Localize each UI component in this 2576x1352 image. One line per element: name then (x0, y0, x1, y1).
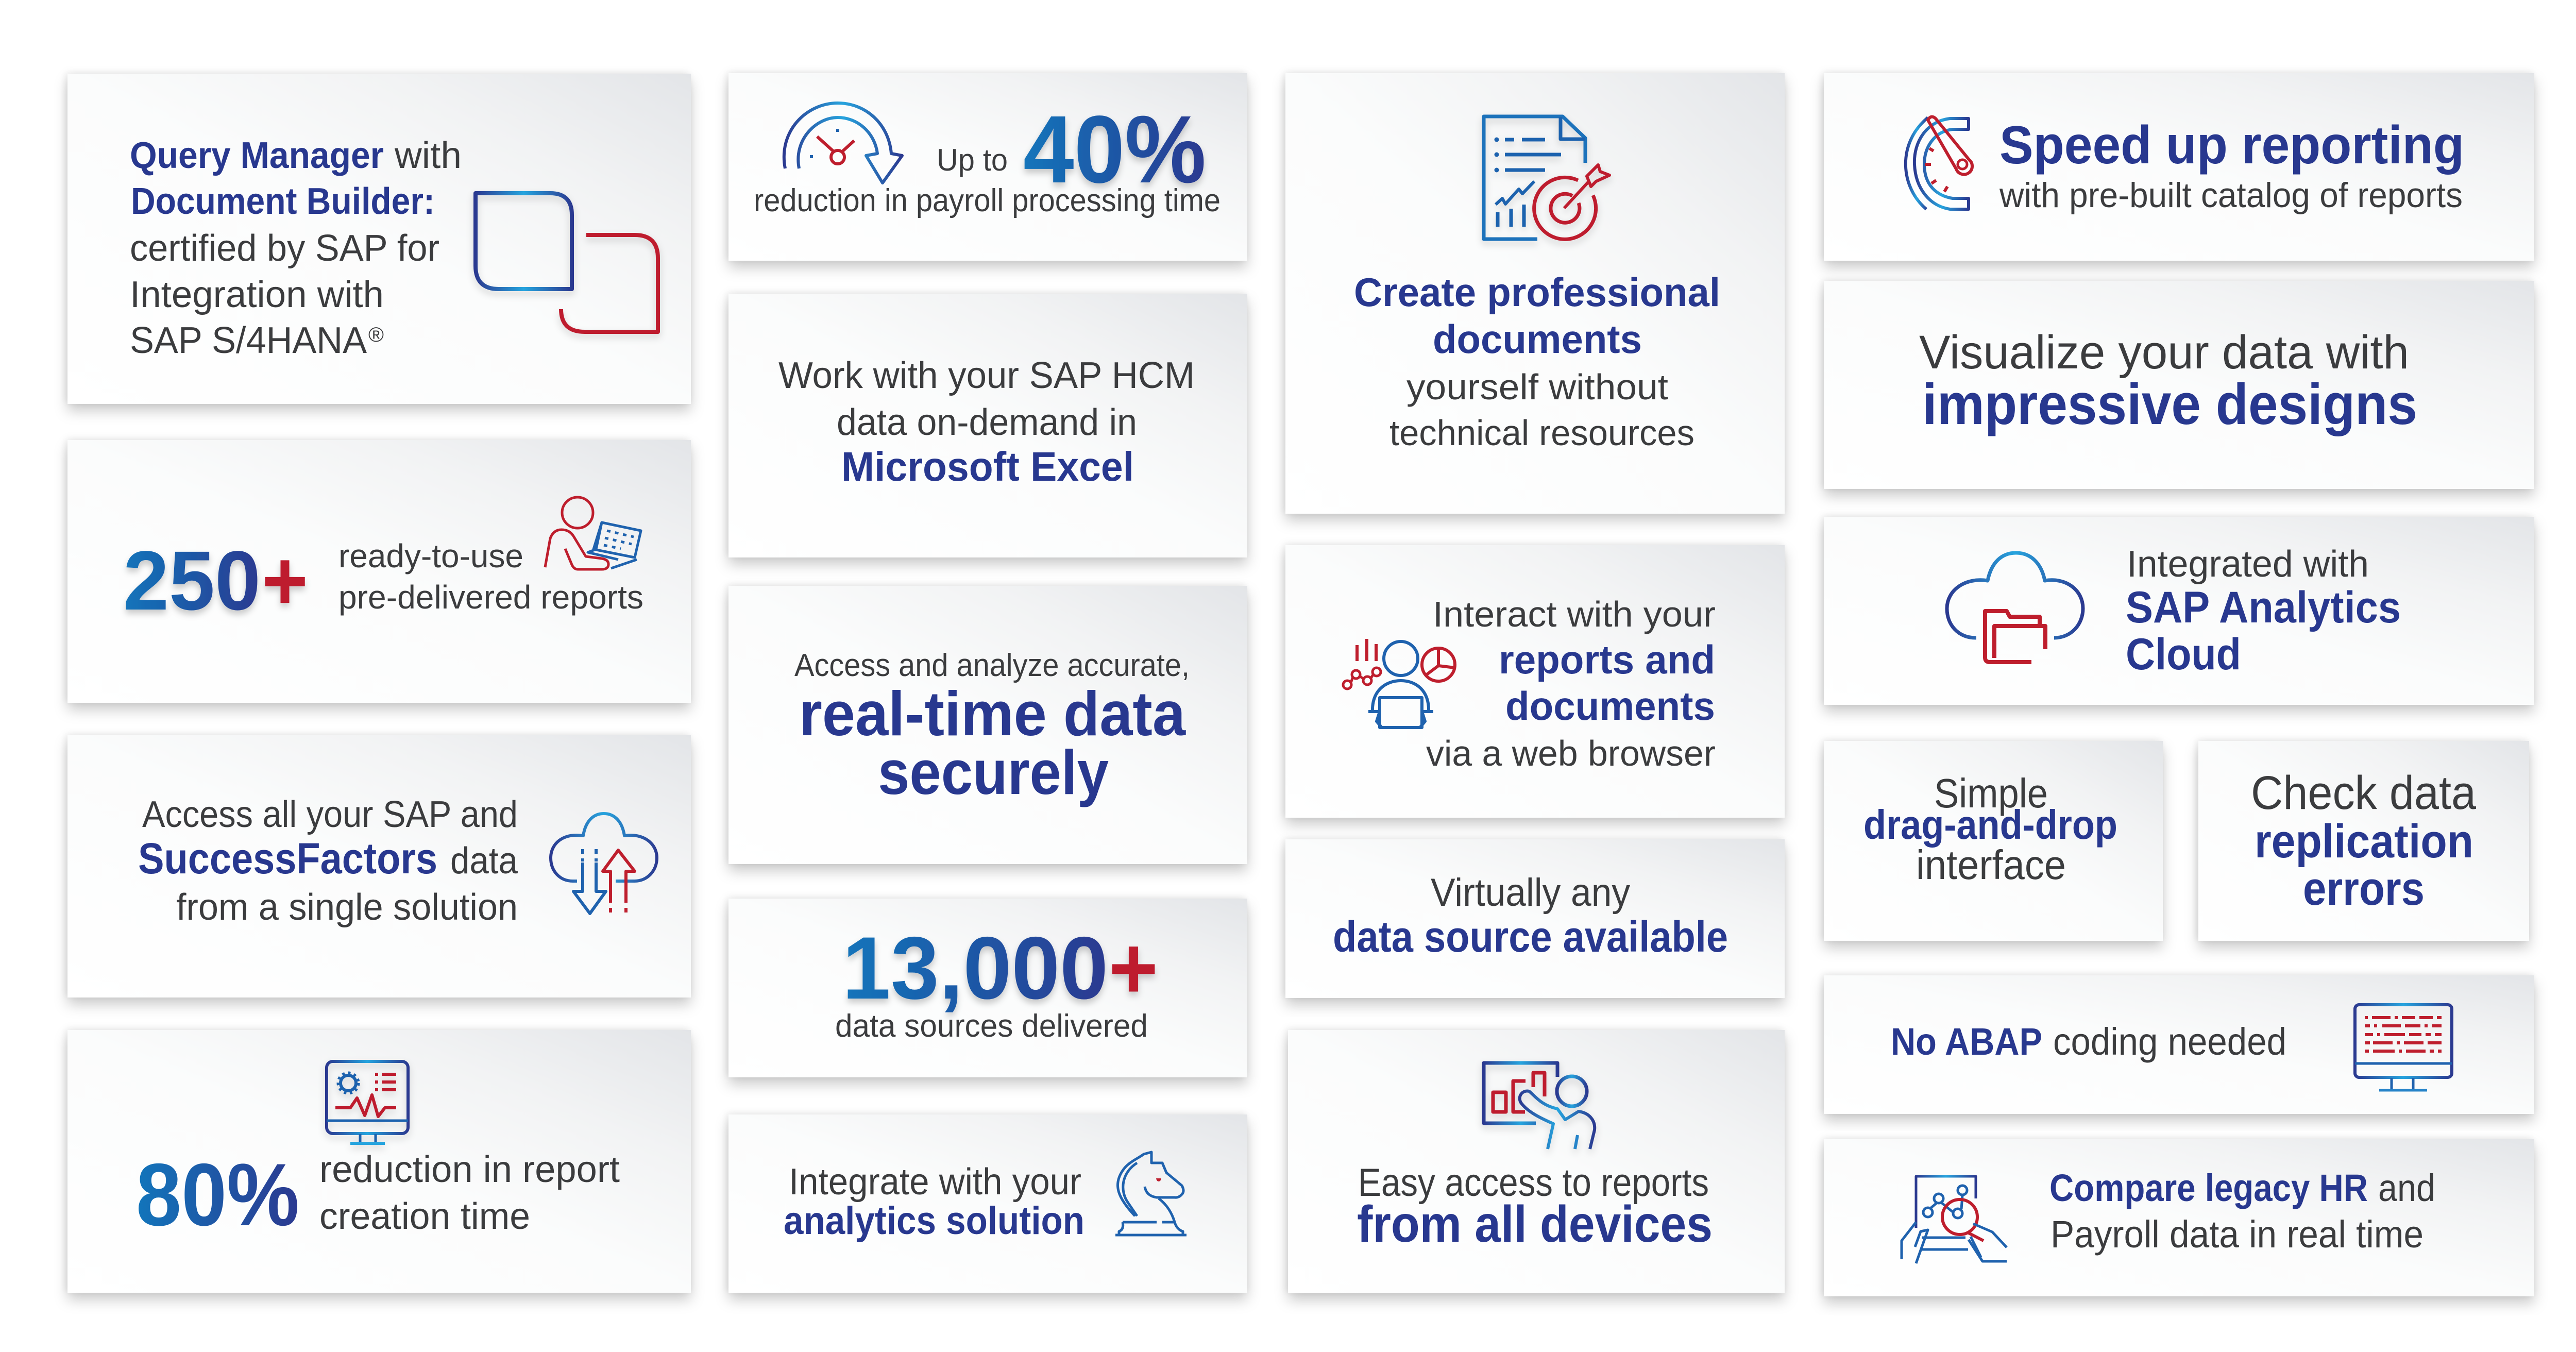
text: simple drag-and-drop interface: drag-and-drop (1863, 802, 2117, 848)
text: reduction in report creation time: reduction in report (319, 1149, 620, 1190)
panel: 13,000+ data sources (728, 899, 1247, 1077)
text: speed up reporting (1999, 115, 2464, 215)
text: interact with reports and documents: documents (1505, 683, 1715, 729)
text: compare legacy HR and payroll data: Payroll data in real time (2050, 1213, 2424, 1256)
text: speed up reporting: Speed up reporting (1999, 115, 2464, 175)
text: Query Manager certification (130, 135, 462, 361)
text: create professional documents: Create professional (1354, 269, 1720, 315)
icon: document with target (1484, 116, 1609, 239)
text: SuccessFactors single solution: data (450, 840, 518, 882)
panel: create professional documents (1285, 73, 1785, 514)
statistic: 13,000+: + (1109, 919, 1158, 1018)
panel: no ABAP coding (1824, 975, 2534, 1114)
text: compare legacy HR and payroll data: and (2378, 1167, 2435, 1209)
panel: compare legacy HR and payroll (1824, 1139, 2534, 1296)
panel: Microsoft Excel (728, 294, 1247, 557)
icon: cloud with arrows (551, 814, 657, 915)
text: create professional documents (1354, 269, 1720, 453)
text: access real-time data (794, 648, 1190, 807)
text: interact with reports and documents: Interact with your (1433, 594, 1716, 634)
panel: easy access from all devices (1288, 1030, 1785, 1293)
panel: SAP Analytics Cloud (1824, 517, 2534, 705)
text: no ABAP coding needed (1891, 1020, 2286, 1063)
panel: SuccessFactors access (67, 735, 691, 998)
text: integrated with SAP Analytics Cloud (2126, 544, 2401, 679)
text: access real-time data: securely (878, 737, 1109, 807)
text: Query Manager certification: with (394, 135, 462, 176)
text: access real-time data: Access and analyze accurate, (794, 648, 1190, 683)
panel: interact via web browser (1285, 545, 1785, 818)
text: SuccessFactors single solution: from a single solution (176, 887, 518, 928)
text: interact with reports and documents: reports and (1499, 637, 1715, 682)
text: interact with reports and documents (1426, 594, 1716, 773)
text: check data replication errors: errors (2303, 863, 2425, 915)
panel: 250+ reports (67, 440, 691, 703)
icon: chess knight (1115, 1152, 1187, 1235)
text: virtually any data source available: Virtually any (1431, 871, 1630, 915)
text: visualize data (1919, 326, 2417, 436)
icon: clock with arrow (784, 103, 902, 183)
text: Query Manager certification: certified by SAP for (130, 228, 439, 269)
text: SuccessFactors single solution: Access all your SAP and (142, 794, 518, 835)
text: access real-time data: real-time data (799, 679, 1186, 749)
statistic: 13,000+: 13,000 (842, 919, 1108, 1018)
text: visualize data: impressive designs (1922, 372, 2417, 436)
text: Query Manager certification: SAP S/4HANA (130, 320, 367, 361)
text: integrated with SAP Analytics Cloud: Cloud (2126, 630, 2241, 679)
panel: check data replication errors (2198, 741, 2529, 941)
text: work with SAP HCM data in Excel: Microsoft Excel (841, 444, 1134, 489)
icon: overlapping rounded squares (476, 193, 658, 332)
text: Query Manager certification: Query Manager (130, 135, 384, 176)
icon: monitor with dashboard (327, 1061, 408, 1143)
text: integrated with SAP Analytics Cloud: Integrated with (2127, 544, 2369, 585)
text: check data replication errors: replication (2255, 815, 2473, 868)
text: SuccessFactors single solution: SuccessFactors (138, 834, 437, 883)
panel: 40% reduction in payroll (728, 73, 1247, 261)
text: check data replication errors (2251, 767, 2477, 915)
text: work with SAP HCM data in Excel (778, 355, 1195, 489)
text: reduction in payroll processing time: reduction in payroll processing time (754, 183, 1221, 218)
text: integrated with SAP Analytics Cloud: SAP Analytics (2126, 583, 2401, 632)
text: work with SAP HCM data in Excel: data on-demand in (837, 402, 1137, 443)
text: interact with reports and documents: via a web browser (1426, 733, 1716, 773)
panel: Query Manager with Document Builder (67, 74, 691, 404)
text: virtually any data source available: data source available (1333, 912, 1728, 961)
text: easy access from all devices: from all devices (1357, 1195, 1713, 1253)
panel: speed up reporting (1824, 73, 2534, 261)
icon: presenter pointing at chart (1484, 1063, 1595, 1149)
panel: real-time data securely (728, 586, 1247, 864)
icon: user with laptop and charts (1343, 639, 1455, 728)
statistic: 250+: + (262, 533, 308, 628)
icon: person with laptop (545, 497, 641, 569)
text: SuccessFactors single solution (138, 794, 518, 928)
text: pre-delivered reports (338, 537, 643, 616)
text: up to: Up to (937, 143, 1008, 177)
statistic: 40%: 40% (1023, 96, 1206, 203)
text: simple drag-and-drop interface: Simple (1934, 770, 2048, 816)
panel: analytics solution (728, 1114, 1247, 1293)
text: data sources delivered: data sources delivered (835, 1008, 1148, 1044)
text: simple drag-and-drop interface (1863, 770, 2117, 888)
text: integrate analytics solution: analytics solution (784, 1199, 1084, 1243)
text: pre-delivered reports: pre-delivered reports (338, 579, 643, 616)
panel: drag-and-drop interface (1824, 741, 2163, 941)
text: pre-delivered reports: ready-to-use (338, 537, 523, 574)
panel: visualize with impressive designs (1824, 281, 2534, 489)
text: compare legacy HR and payroll data: Compare legacy HR (2049, 1167, 2368, 1209)
text: create professional documents: technical resources (1389, 413, 1694, 453)
text: Query Manager certification: Document Builder: (131, 181, 435, 222)
text: speed up reporting: with pre-built catalog of reports (1999, 176, 2463, 215)
text: work with SAP HCM data in Excel: Work with your SAP HCM (778, 355, 1195, 396)
text: no ABAP coding needed: No ABAP (1891, 1020, 2042, 1063)
text: Query Manager certification: ® (368, 324, 384, 346)
text: create professional documents: yourself without (1406, 367, 1668, 407)
text: visualize data: Visualize your data with (1919, 326, 2409, 379)
icon: speedometer (1906, 117, 1972, 209)
text: integrate analytics solution (784, 1161, 1084, 1243)
text: integrate analytics solution: Integrate with your (789, 1161, 1081, 1203)
text: Query Manager certification: Integration with (130, 274, 384, 315)
text: simple drag-and-drop interface: interface (1916, 842, 2066, 888)
text: reduction in report creation time: creation time (319, 1196, 530, 1237)
text: virtually any data source available (1333, 871, 1728, 961)
icon: cloud with folders (1947, 553, 2083, 662)
text: compare legacy HR and payroll data (2049, 1167, 2435, 1256)
icon: tablet with magnifier (1902, 1176, 2007, 1263)
statistic: 80%: 80% (136, 1145, 299, 1244)
text: no ABAP coding needed: coding needed (2053, 1020, 2286, 1063)
text: check data replication errors: Check data (2251, 767, 2477, 819)
panel: 80% reduction in report creation (67, 1030, 691, 1293)
panel: virtually any data source (1285, 839, 1785, 998)
statistic: 250+: 250 (123, 533, 261, 628)
text: create professional documents: documents (1433, 316, 1642, 362)
text: easy access from all devices: Easy access to reports (1358, 1161, 1709, 1205)
text: easy access from all devices (1357, 1161, 1713, 1253)
icon: monitor with code (2355, 1005, 2452, 1090)
text: reduction in report creation time (319, 1149, 620, 1237)
